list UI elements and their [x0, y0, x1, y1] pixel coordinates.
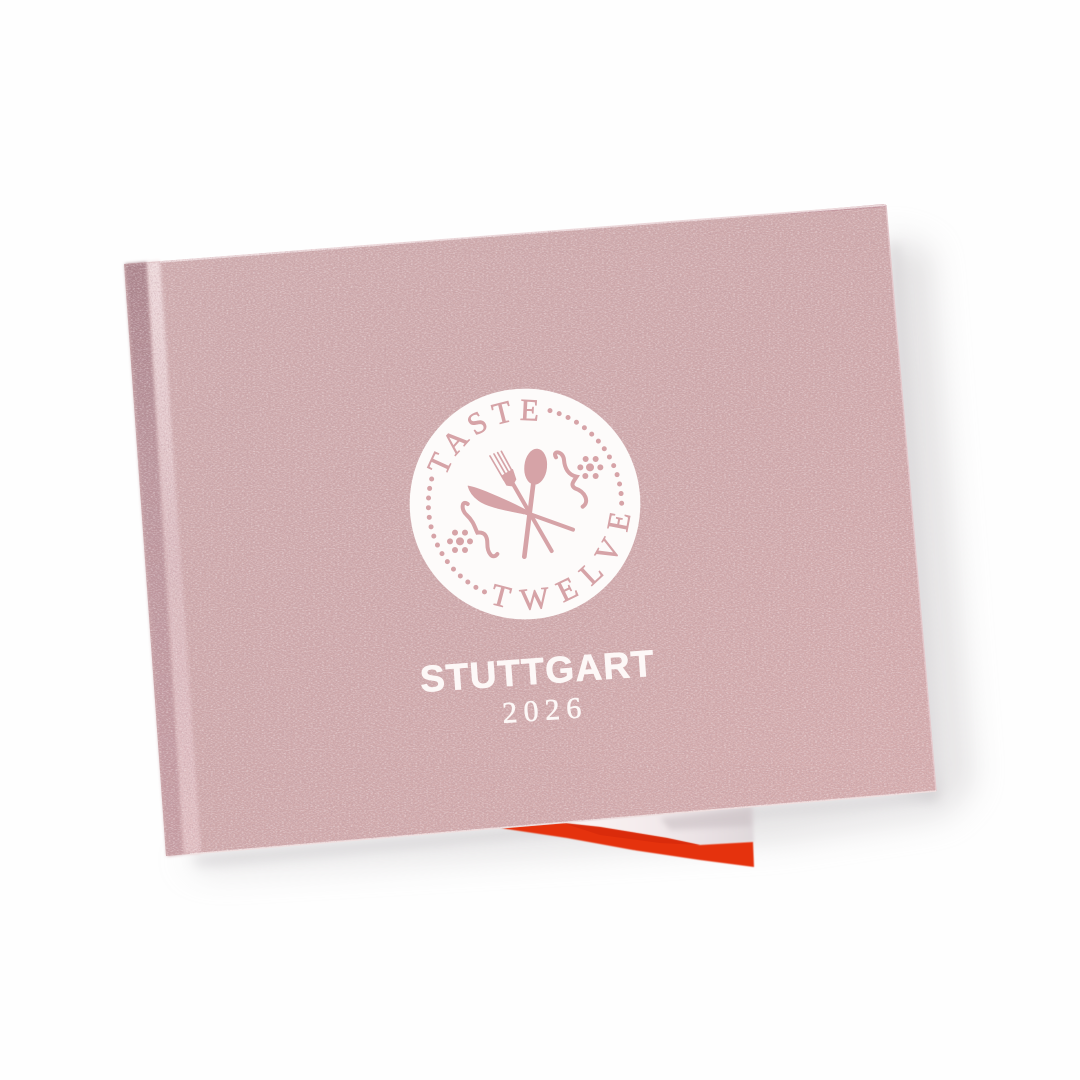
right edge highlight: [886, 205, 936, 791]
book shadow: [180, 235, 972, 872]
icon: fork: [490, 451, 552, 551]
spine dark band: [125, 262, 184, 856]
page shadow: [660, 808, 752, 830]
white page edge: [562, 806, 754, 846]
icon: knife: [468, 486, 573, 530]
year: 2026: 2026: [501, 692, 582, 730]
badge text: TWELVE: TWELVE: [493, 513, 630, 610]
badge text: TASTE: TASTE: [426, 399, 538, 473]
icon: ribbon and grapes, lower left: [447, 503, 497, 556]
book cover: [110, 195, 950, 870]
red ribbon: [500, 823, 754, 867]
white circle: [410, 389, 640, 619]
linen texture light threads: [110, 195, 950, 870]
icon: ribbon and grapes, upper right: [555, 452, 603, 507]
linen texture dark threads: [110, 195, 950, 870]
bottom edge highlight: [190, 791, 936, 854]
logo badge: [410, 388, 640, 620]
spine light groove: [147, 261, 201, 854]
top edge highlight: [160, 205, 886, 262]
title: STUTTGART: STUTTGART: [419, 643, 655, 700]
book photo scene: [123, 204, 980, 878]
icon: spoon: [523, 448, 548, 557]
icon: crossed cutlery: [468, 448, 573, 557]
dotted arcs: [428, 411, 622, 594]
page block and bookmark: [500, 806, 754, 867]
back cover top edge: [780, 204, 886, 214]
